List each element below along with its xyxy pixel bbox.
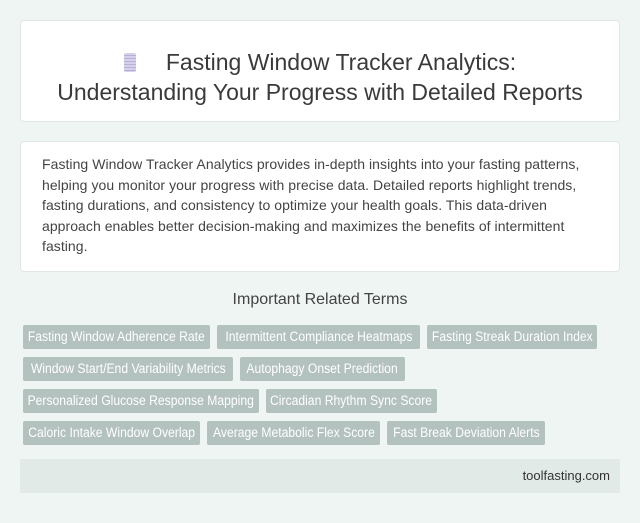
title: Understanding Your Progress with Detailed Reports	[57, 79, 583, 105]
footer	[20, 459, 620, 493]
tags: Autophagy Onset Prediction	[247, 361, 398, 376]
tags: Fast Break Deviation Alerts	[393, 425, 539, 440]
tags: Fasting Window Adherence Rate	[28, 329, 205, 344]
tags: Fasting Streak Duration Index	[432, 329, 592, 344]
description text: Fasting Window Tracker Analytics provides in-depth insights into your fasting patterns, helping you monitor your progress with precise data. Detailed reports highlight trends, fasting durations, and consistency to optimize your health goals. This data-driven approach enables better decision-making and maximizes the benefits of intermittent fasting.	[42, 156, 579, 254]
title panel	[20, 20, 620, 122]
tags: Personalized Glucose Response Mapping	[28, 393, 254, 408]
tags: Average Metabolic Flex Score	[213, 425, 374, 440]
tags: Window Start/End Variability Metrics	[31, 361, 225, 376]
tags: Caloric Intake Window Overlap	[28, 425, 195, 440]
tags: Intermittent Compliance Heatmaps	[225, 329, 412, 344]
footer: toolfasting.com	[523, 468, 610, 483]
title	[57, 49, 583, 105]
description panel	[20, 141, 620, 272]
section heading: Important Related Terms	[233, 291, 407, 308]
tags	[23, 325, 597, 445]
title: Fasting Window Tracker Analytics:	[166, 49, 516, 75]
tags: Circadian Rhythm Sync Score	[270, 393, 433, 408]
